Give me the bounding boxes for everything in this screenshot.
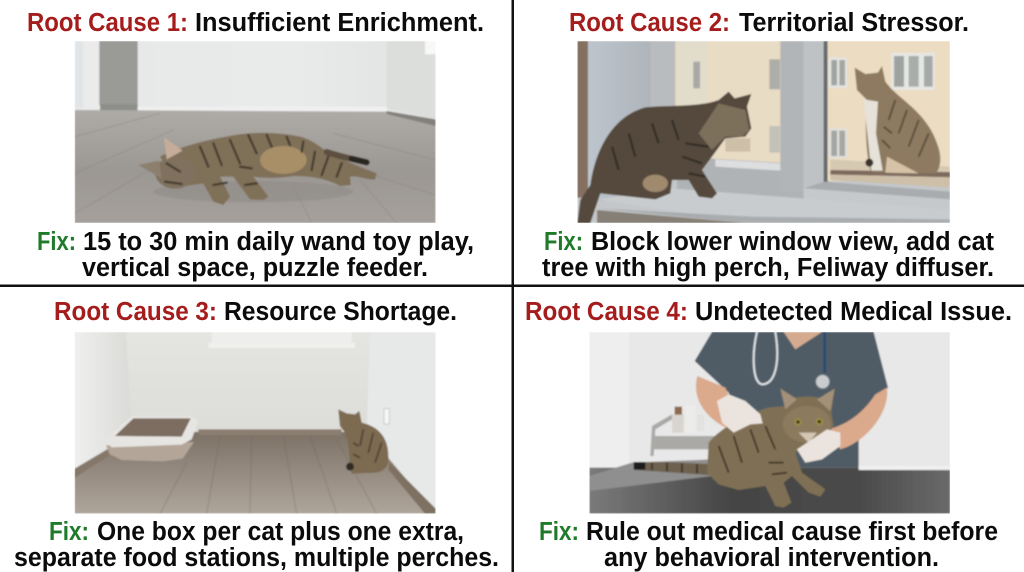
heading: root cause 3 label: Root Cause 3:: [54, 298, 217, 326]
fix text: line 1: Block lower window view, add cat: [591, 228, 994, 256]
heading: territorial stressor: Territorial Stressor.: [739, 9, 969, 37]
fix text: line 1: Rule out medical cause first before: [586, 518, 998, 546]
cat outside: [855, 66, 940, 173]
fix text: line 1: One box per cat plus one extra,: [97, 518, 464, 546]
heading: root cause 1 label: Root Cause 1:: [27, 9, 188, 37]
fix text: line 1 label: Fix:: [539, 518, 579, 546]
fix text: line 2: vertical space, puzzle feeder.: [82, 254, 428, 282]
arms: [695, 376, 729, 428]
cat: [338, 409, 389, 474]
panel: root cause 1: [27, 9, 484, 282]
cat: [634, 462, 712, 475]
panel: root cause 3: [14, 298, 499, 572]
image: two cats at a window: [577, 41, 950, 223]
scrubs: [695, 332, 888, 468]
fix text: line 2: any behavioral intervention.: [604, 544, 939, 572]
shelf and bottles: [650, 414, 672, 456]
cat: [160, 133, 377, 205]
cat inside: [577, 92, 751, 223]
fix text: line 2: separate food stations, multiple perches.: [14, 544, 499, 572]
image: litter box and cat in a bare room: [75, 332, 436, 514]
heading: root cause 2 label: Root Cause 2:: [569, 9, 730, 37]
image: cat lying on empty floor: [75, 41, 436, 223]
stethoscope: [754, 332, 777, 384]
fix text: line 1 label: Fix:: [49, 518, 89, 546]
lower frame: [677, 157, 804, 200]
heading: root cause 4 label: Root Cause 4:: [525, 298, 688, 326]
image: vet examining a cat on a steel table: [589, 332, 950, 514]
fix text: line 2: tree with high perch, Feliway diffuser.: [542, 254, 994, 282]
fix text: line 1: 15 to 30 min daily wand toy play,: [83, 228, 474, 256]
panel: root cause 4: [525, 298, 1012, 572]
litter box: [106, 442, 194, 461]
fix text: line 1 label: Fix:: [37, 228, 76, 256]
heading: resource shortage: Resource Shortage.: [224, 298, 457, 326]
heading: insufficient enrichment: Insufficient Enrichment.: [195, 9, 484, 37]
fix text: line 1 label: Fix:: [544, 228, 583, 256]
table: [589, 468, 950, 514]
panel: root cause 2: [542, 9, 994, 282]
heading: undetected medical issue: Undetected Medical Issue.: [695, 298, 1012, 326]
gloves: [717, 394, 763, 433]
